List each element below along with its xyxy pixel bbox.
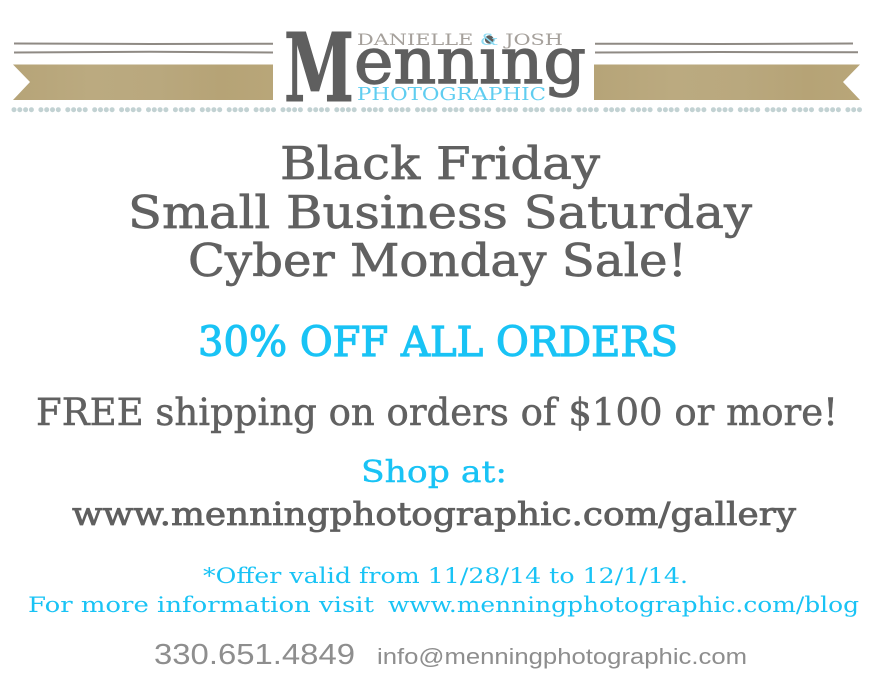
blog link line: www.menningphotographic.com/blog (388, 593, 859, 617)
left header ribbon (13, 44, 273, 100)
dotted divider (14, 107, 862, 112)
blog link line: For more information visit (28, 593, 375, 617)
email address: info@menningphotographic.com (377, 644, 747, 669)
headline line 3: Cyber Monday Sale! (188, 234, 687, 287)
discount offer: 30% OFF ALL ORDERS (198, 318, 678, 366)
free shipping line: FREE shipping on orders of $100 or more! (36, 391, 838, 434)
headline (128, 137, 753, 287)
logo: Danielle and Josh: DANIELLE & JOSH (357, 30, 563, 49)
shop at label: Shop at: (361, 455, 507, 490)
headline line 2: Small Business Saturday (128, 186, 753, 239)
logo: enning: enning (354, 25, 586, 99)
right header ribbon (594, 44, 860, 100)
logo: Photographic: PHOTOGRAPHIC (357, 84, 546, 105)
offer dates: *Offer valid from 11/28/14 to 12/1/14. (203, 564, 688, 588)
phone number: 330.651.4849 (154, 639, 355, 671)
gallery URL: www.menningphotographic.com/gallery (72, 495, 796, 533)
headline line 1: Black Friday (280, 137, 601, 190)
blog link line (28, 593, 859, 617)
logo: big M: M (284, 13, 354, 124)
logo (284, 13, 586, 124)
